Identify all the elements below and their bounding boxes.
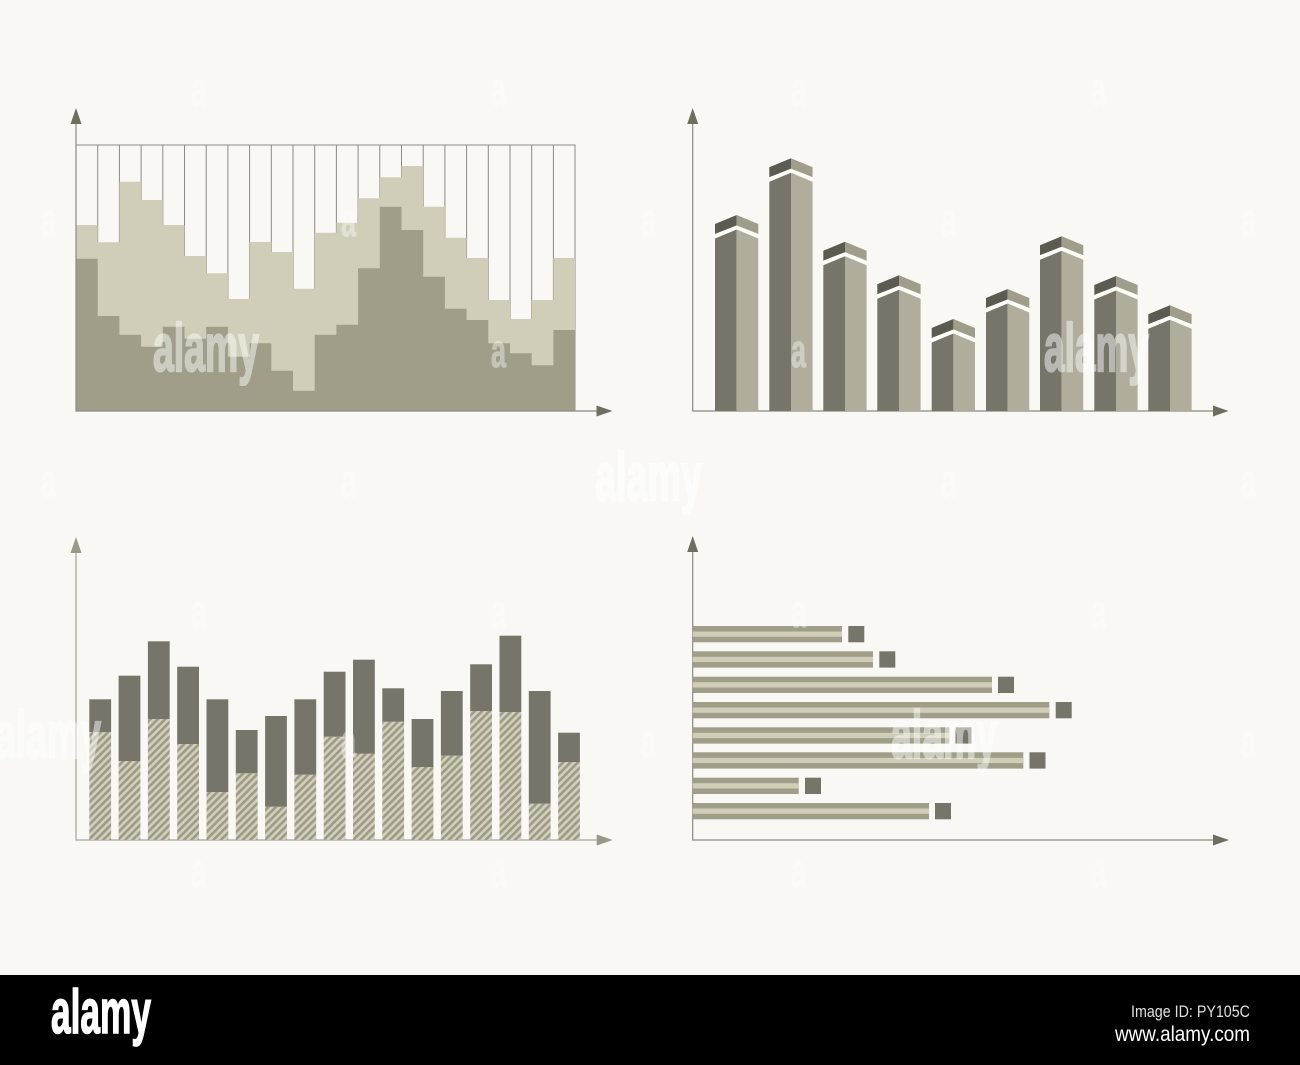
watermarks: a xyxy=(491,584,506,637)
watermarks: a xyxy=(941,454,956,507)
column 5 xyxy=(932,319,975,411)
watermarks: a xyxy=(1091,844,1106,897)
watermarks: alamy xyxy=(153,310,259,386)
column 7 xyxy=(1040,236,1083,411)
watermarks: alamy xyxy=(0,697,101,773)
end markers xyxy=(805,626,1072,819)
column 9 xyxy=(1148,305,1192,411)
watermarks: a xyxy=(491,844,506,897)
column 2 xyxy=(769,158,813,411)
watermarks: alamy xyxy=(595,439,702,515)
watermarks: a xyxy=(791,324,806,377)
light area series xyxy=(76,166,575,411)
watermarks: a xyxy=(641,193,656,246)
column 3 xyxy=(823,242,867,411)
watermarks: a xyxy=(1091,62,1106,115)
watermarks: a xyxy=(341,454,356,507)
watermarks: a xyxy=(341,193,356,246)
watermarks: a xyxy=(1091,584,1106,637)
watermarks: a xyxy=(191,62,206,115)
dark area series xyxy=(76,207,575,411)
watermarks: a xyxy=(941,193,956,246)
watermarks: a xyxy=(1241,454,1256,507)
chart: stacked hatched bars xyxy=(70,537,613,846)
image id: Image ID: PY105C xyxy=(1131,1002,1250,1021)
axes xyxy=(70,108,612,416)
chart: horizontal striped bars xyxy=(687,536,1229,846)
watermarks: alamy xyxy=(891,697,997,773)
watermarks: a xyxy=(791,844,806,897)
watermarks xyxy=(0,62,1256,897)
footer logo: alamy xyxy=(51,978,151,1047)
column 4 xyxy=(877,275,921,411)
watermarks: a xyxy=(491,324,506,377)
watermarks: a xyxy=(41,454,56,507)
watermarks: a xyxy=(791,584,806,637)
watermarks: a xyxy=(491,62,506,115)
watermarks: a xyxy=(641,714,656,767)
axes xyxy=(687,536,1229,846)
column 8 xyxy=(1094,276,1138,411)
bars dark base xyxy=(693,626,1049,819)
watermarks: a xyxy=(1241,714,1256,767)
footer bar xyxy=(0,975,1300,1065)
bars light centre stripes xyxy=(693,632,1049,814)
website: www.alamy.com xyxy=(1114,1023,1250,1046)
hatched lower segments xyxy=(89,711,580,840)
watermarks: a xyxy=(341,714,356,767)
watermarks: a xyxy=(41,193,56,246)
chart: stepped area chart xyxy=(70,108,612,416)
watermarks: a xyxy=(191,584,206,637)
axes xyxy=(70,537,613,846)
watermarks: alamy xyxy=(1044,310,1149,386)
watermarks: a xyxy=(791,62,806,115)
watermarks: a xyxy=(191,844,206,897)
dark upper segments xyxy=(89,636,580,807)
axes xyxy=(687,108,1228,416)
column 1 xyxy=(715,215,758,411)
watermarks: a xyxy=(1241,193,1256,246)
chart: 3D column chart xyxy=(687,108,1228,416)
column 6 xyxy=(986,289,1029,411)
